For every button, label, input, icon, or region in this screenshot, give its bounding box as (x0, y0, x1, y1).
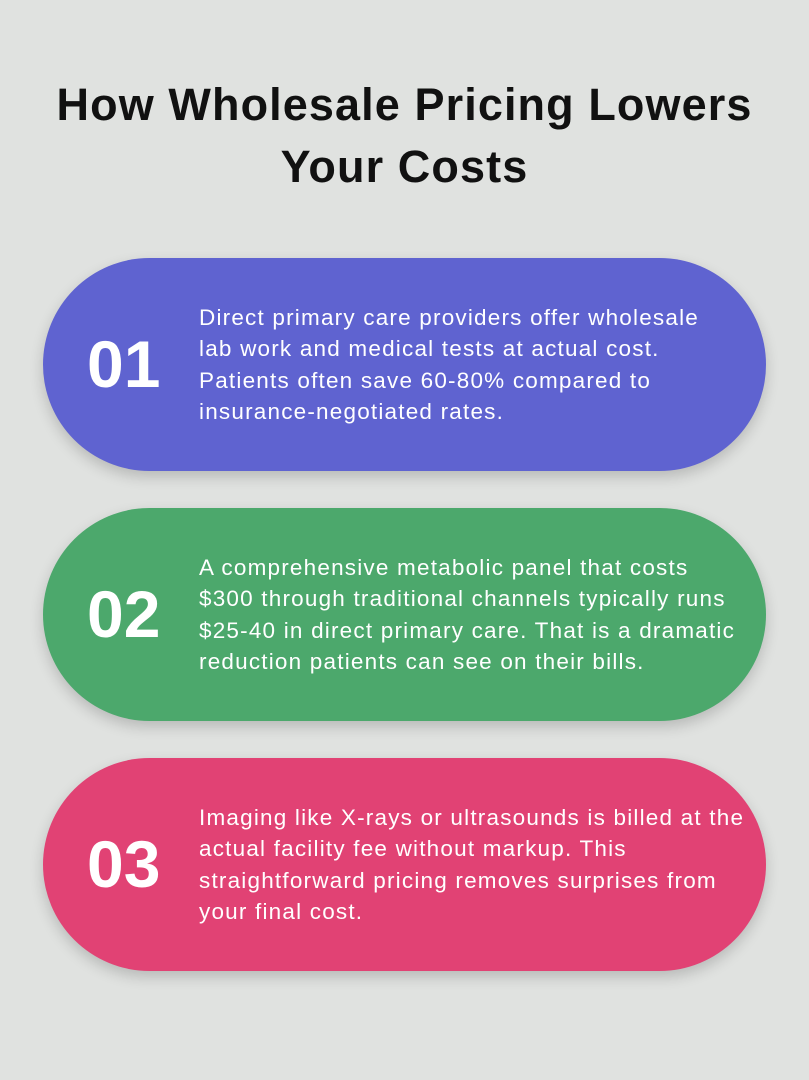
text: step 01: Patients often save 60-80% compared to (199, 368, 651, 392)
panel: step 01 (43, 258, 766, 471)
text: step 03: actual facility fee without markup. This (199, 836, 627, 861)
panel: step 03 (43, 758, 766, 971)
text: step 02: reduction patients can see on their bills. (199, 649, 645, 674)
text: step 01: lab work and medical tests at actual cost. (199, 336, 660, 361)
text: step 01 (199, 304, 699, 424)
text: step 03: Imaging like X-rays or ultrasounds is billed at the (199, 804, 744, 830)
text: step 02: $300 through traditional channels typically runs (199, 586, 726, 611)
title (57, 79, 752, 192)
text: step 02 (199, 554, 735, 674)
text: step 01: Direct primary care providers offer wholesale (199, 304, 699, 330)
title: How Wholesale Pricing Lowers (57, 79, 752, 130)
text: step 03 (199, 804, 744, 924)
text: step 03: straightforward pricing removes surprises from (199, 868, 717, 892)
title: Your Costs (281, 141, 528, 192)
number 03: 03 (87, 827, 160, 901)
text: step 01: insurance-negotiated rates. (199, 399, 504, 424)
panel: step 02 (43, 508, 766, 721)
number 01: 01 (87, 327, 160, 401)
number 02: 02 (87, 577, 160, 651)
text: step 03: your final cost. (199, 899, 363, 924)
text: step 02: $25-40 in direct primary care. That is a dramatic (199, 618, 735, 642)
text: step 02: A comprehensive metabolic panel that costs (199, 554, 688, 580)
